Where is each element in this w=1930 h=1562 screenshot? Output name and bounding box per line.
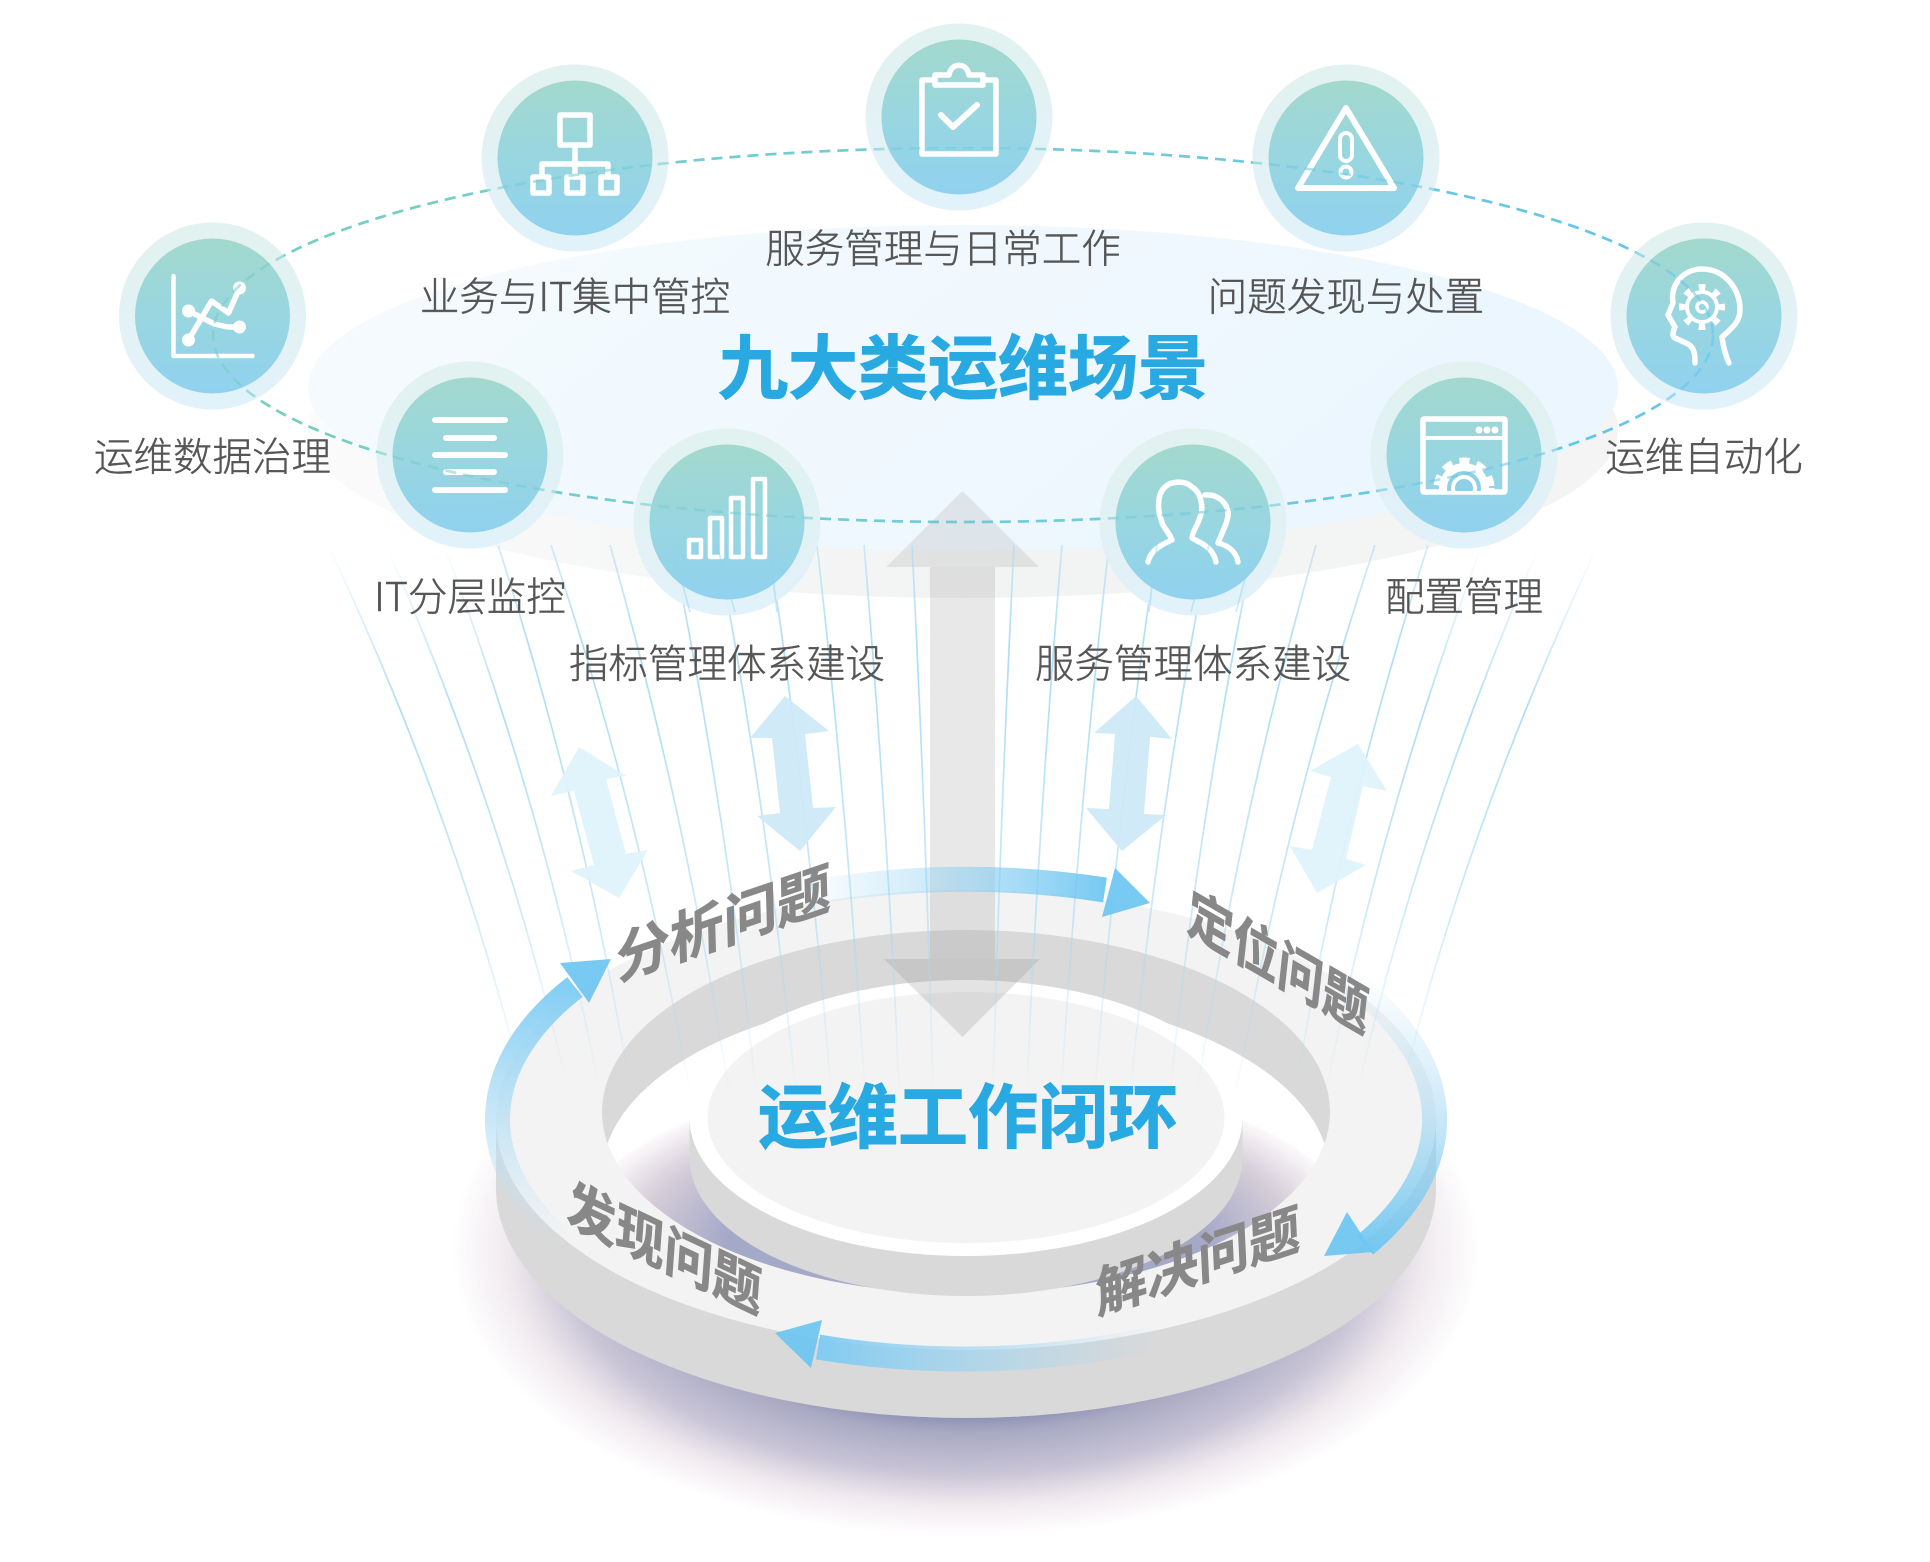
label: 服务管理与日常工作 bbox=[765, 218, 1121, 275]
label: 服务管理体系建设 bbox=[1035, 633, 1351, 690]
icon: line chart bbox=[174, 276, 252, 356]
arc arrow: right bbox=[1324, 968, 1435, 1256]
ring label: 发现问题: 发现问题 bbox=[565, 1158, 765, 1330]
node: 运维数据治理 bbox=[94, 222, 331, 483]
center cylinder top bbox=[708, 992, 1224, 1243]
arc arrow: bottom bbox=[775, 1320, 1160, 1368]
loop arrows bbox=[497, 868, 1435, 1368]
node: 配置管理 bbox=[1370, 362, 1558, 623]
center title: 运维工作闭环: 运维工作闭环 bbox=[758, 1062, 1178, 1163]
icon: layered lines bbox=[435, 420, 505, 490]
icon: window with gear bbox=[1420, 416, 1508, 495]
node: IT分层监控 bbox=[374, 362, 566, 623]
center cylinder white rim bbox=[690, 980, 1242, 1256]
label: 指标管理体系建设 bbox=[569, 633, 885, 690]
label: 运维数据治理 bbox=[94, 426, 331, 483]
node: 服务管理体系建设 bbox=[1035, 428, 1351, 690]
outer ring wall bbox=[496, 1120, 1436, 1418]
node: 服务管理与日常工作 bbox=[765, 24, 1121, 275]
label: IT分层监控 bbox=[374, 566, 566, 623]
icon: clipboard bbox=[922, 65, 996, 154]
hole floor with glow bbox=[608, 1023, 1324, 1288]
node: 业务与IT集中管控 bbox=[420, 64, 730, 323]
ring label: 定位问题: 定位问题 bbox=[1184, 867, 1373, 1050]
arc arrow: top bbox=[800, 868, 1150, 917]
outer ring top surface bbox=[496, 890, 1436, 1350]
dashed orbit through scenario icons bbox=[213, 148, 1713, 522]
icon: org chart bbox=[533, 115, 617, 193]
center cylinder wall bbox=[690, 1118, 1242, 1296]
label: 问题发现与处置 bbox=[1208, 266, 1484, 323]
inner hole wall bbox=[602, 930, 1330, 1294]
icon: bar signal bbox=[689, 479, 765, 557]
arc arrow: left bbox=[497, 959, 611, 1239]
arrow: inner right bbox=[1086, 696, 1172, 851]
arrow: inner left bbox=[750, 696, 836, 851]
icon: warning triangle bbox=[1298, 108, 1394, 188]
platform: loop rings bbox=[496, 890, 1436, 1430]
central double arrow bbox=[884, 491, 1040, 1037]
label: 配置管理 bbox=[1385, 566, 1543, 623]
ring label: 分析问题: 分析问题 bbox=[615, 843, 832, 997]
icon: people bbox=[1148, 482, 1238, 562]
scene disc bbox=[308, 225, 1618, 551]
node: 运维自动化 bbox=[1605, 222, 1803, 483]
shadow: purple glow under platform bbox=[436, 955, 1496, 1545]
node: 指标管理体系建设 bbox=[569, 428, 885, 690]
ring label: 解决问题: 解决问题 bbox=[1094, 1184, 1302, 1330]
label: 业务与IT集中管控 bbox=[420, 266, 730, 323]
small double arrows bbox=[551, 696, 1387, 898]
icon: head with gear bbox=[1668, 269, 1740, 363]
label: 运维自动化 bbox=[1605, 426, 1803, 483]
funnel lines overlay on lower node circles bbox=[672, 545, 1254, 612]
scene disc shadow bbox=[308, 262, 1618, 598]
dashed orbit overlay across icons bbox=[213, 148, 1713, 522]
arrow: far right bbox=[1290, 744, 1387, 893]
top title: 九大类运维场景: 九大类运维场景 bbox=[718, 313, 1208, 414]
node: 问题发现与处置 bbox=[1208, 64, 1484, 323]
arrow: far left bbox=[551, 747, 648, 898]
funnel lines bbox=[328, 545, 1598, 1090]
